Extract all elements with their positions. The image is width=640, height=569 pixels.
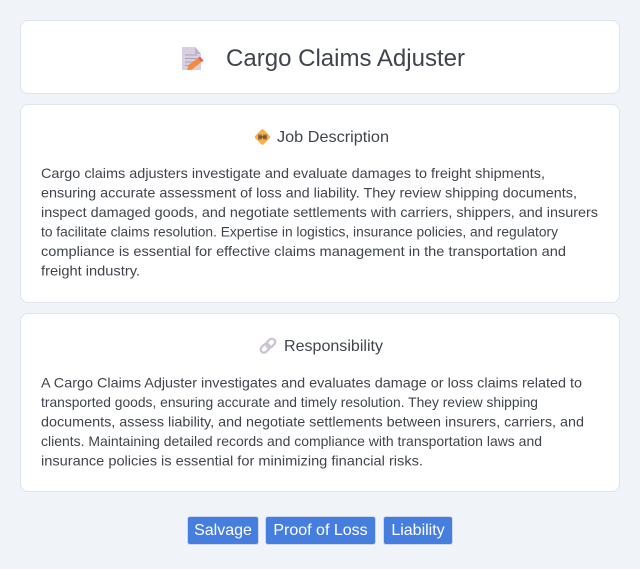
responsibility text: insurance policies is essential for minimizing financial risks.	[41, 452, 423, 468]
description text: ensuring accurate assessment of loss and liability. They review shipping documents,	[41, 184, 577, 200]
heading: responsibility: Responsibility	[284, 338, 383, 355]
tag: salvage: Salvage	[194, 522, 252, 539]
title row	[182, 45, 465, 72]
description text	[41, 165, 598, 278]
icon: document with pencil	[182, 47, 204, 70]
description text: compliance is essential for effective claims management in the transportation and	[41, 243, 566, 259]
responsibility text: clients. Maintaining detailed records and compliance with transportation laws and	[41, 433, 542, 449]
description text: to facilitate claims resolution. Expertise in logistics, insurance policies, and regulatory	[41, 224, 558, 240]
tag: salvage	[187, 516, 259, 545]
tag: liability	[383, 516, 453, 545]
panel: job description	[20, 104, 620, 303]
responsibility text: documents, assess liability, and negotiate settlements between insurers, carriers, and	[41, 414, 584, 430]
panel: title card	[20, 20, 620, 94]
tag: proof of loss	[265, 516, 376, 545]
responsibility text: A Cargo Claims Adjuster investigates and evaluates damage or loss claims related to	[41, 374, 582, 390]
panel: responsibility	[20, 313, 620, 492]
title text: Cargo Claims Adjuster	[226, 45, 465, 72]
responsibility text: transported goods, ensuring accurate and timely resolution. They review shipping	[41, 394, 538, 410]
description text: Cargo claims adjusters investigate and evaluate damages to freight shipments,	[41, 165, 545, 181]
description text: inspect damaged goods, and negotiate settlements with carriers, shippers, and insurers	[41, 204, 598, 220]
icon: chain link	[259, 337, 277, 354]
heading: job description: Job Description	[277, 129, 389, 146]
tag: proof of loss: Proof of Loss	[273, 522, 368, 539]
tag row	[187, 516, 453, 545]
description text: freight industry.	[41, 262, 140, 278]
responsibility text	[41, 374, 584, 468]
icon: construction diamond	[254, 129, 271, 145]
tag: liability: Liability	[391, 522, 445, 539]
